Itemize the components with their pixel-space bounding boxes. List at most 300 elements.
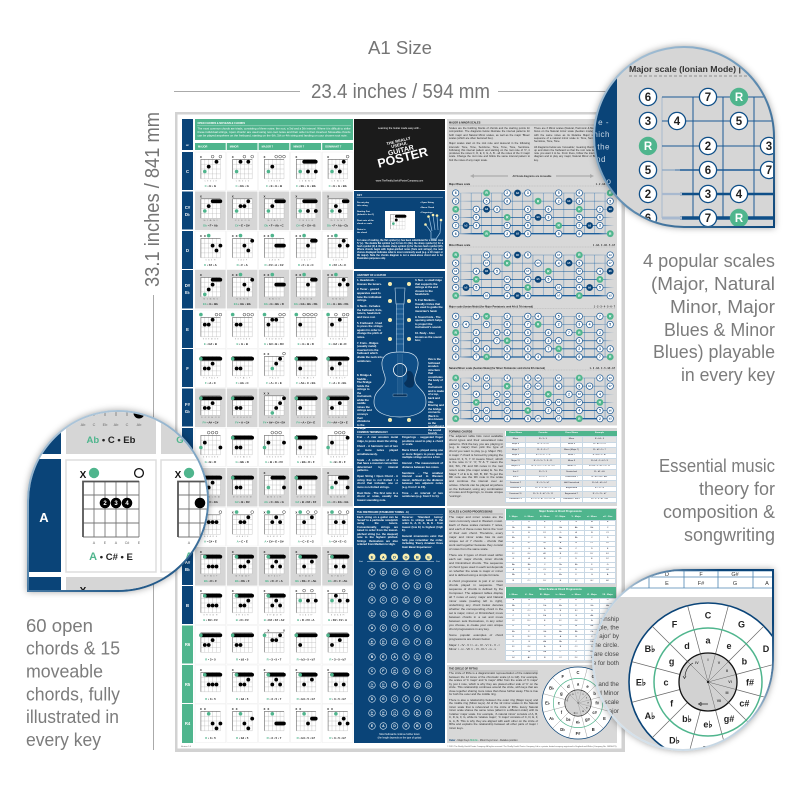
open strings row: B [416,554,419,559]
table: minor scales and chord progressions: C [528,604,530,606]
magnifier: circle of fifths detail [592,569,774,751]
table: minor scales and chord progressions: F [591,599,593,601]
chord row: F: F C F A C F [203,376,218,380]
caption: scales: Blues) playable [653,342,775,362]
fretboard notes: F# [405,712,407,714]
chord row: A sharp [195,547,353,586]
chord row: B: X [264,589,266,593]
chord row: B: B • D# • F# [203,618,218,622]
fretboard notes: C# [382,613,385,615]
fretboard notes: G# [416,684,419,686]
chord row: R4 moveable: R • 3 • 5 • b7 [329,736,346,740]
text: scales and progressions: Minor: i - iv - VII / i - VI - III / i - iv - v [449,647,496,651]
chord row: A sharp: X [232,550,234,554]
table: forming chords: Augmented 7 [565,493,578,495]
table: major scales and chord progressions: C [544,564,546,566]
caption: chords: every key [26,730,101,750]
table: forming chords: Minor (Major 7) [564,449,579,451]
chord row: D: D • F • A • C [298,263,315,267]
grey chord card above: C [126,423,129,427]
table: minor scales and chord progressions: E [513,636,514,638]
table: minor scales and chord progressions: B [513,610,514,612]
chord row: B: X [327,589,329,593]
panel: chords header [182,119,353,150]
chord row: G sharp: Ab Eb Ab C Eb Ab [202,496,220,498]
table: minor scales and chord progressions: i - Minor [509,594,518,596]
chord row: F sharp: F# C# F# A C# F# [233,416,252,419]
chord row: R6 moveable: R • b3 • 5 [236,658,249,662]
chord row: C sharp: Db • F • Ab • C [264,224,285,228]
table: minor scales and chord progressions: iv - Minor [556,594,565,596]
magnifier: major scale detail: 5 [645,165,652,177]
table: forming chords: R • b3 • 5 • 6 [593,443,606,445]
table: major scales and chord progressions: B [528,569,530,571]
fretboard notes: Eb [427,714,431,716]
table: major scales and chord progressions: Eb [575,564,578,566]
table: minor scales and chord progressions: A# [528,657,530,659]
table: minor scales and chord progressions: E [560,610,561,612]
chord row: B: B • D • F# • A [297,618,315,622]
chord row: B: B F# A# D# F# [267,614,282,616]
chord row: F: F • A • C • E [266,381,282,385]
text: terminology right: Fingerings - suggested finger positions used to play a chord or scale. Barre Chord - played using one or more fingers to press down multiple strings across a fret. Interval - The measurement of distance between two notes. Semitone - The smallest interval used in Western music, defined as the distance between two adjacent notes (e.g. from F to F#). Tone - an interval of two semitones (e.g. from F to G). [402,436,443,498]
fretboard notes: E [427,724,430,728]
table: major scales and chord progressions: A [544,548,545,550]
fretboard notes: E [393,584,396,588]
fretboard notes: Bb [427,643,431,645]
fretboard notes: D# [405,670,407,672]
chart: circle of fifths wheel: f [670,698,674,708]
chord row: R4 moveable: X [327,707,329,711]
table: minor scales and chord progressions: F# [575,610,577,612]
table: minor scales and chord progressions: VII - Major [602,594,613,596]
chord row: A: A • C • E • G [298,540,315,544]
table: minor scales and chord progressions: D [607,636,608,638]
fretboard notes: A# [393,670,396,672]
table: major scales and chord progressions: Eb [512,537,515,539]
fretboard notes: Bb [371,643,374,645]
chord row: C sharp: C# G# B E G# [299,220,313,222]
heading: major scale: Major scale (Ionian Mode) | [629,65,741,74]
fretboard notes: A# [371,641,373,643]
circle of fifths legend: Outer - Major Keys Middle - Minor Keys Inner - Relative position [449,739,518,742]
panel: chords header: The most common chords are triads, consisting of three notes: the root, a 3rd and a 5th interval. Where it is difficult to strike [198,128,351,130]
chord row: F: F • Ab • C • Eb [296,381,316,385]
row headers: key names [182,152,193,743]
chart: circle of fifths wheel: g [669,656,674,666]
magnifier: major scale detail: 3 [645,116,651,128]
table: minor scales and chord progressions: C [591,636,593,638]
fretboard notes: D# [427,712,430,714]
chord row: F: F • A • C • Eb [329,381,346,385]
fretboard notes: B [382,584,385,588]
panel: key: the chord [357,231,368,234]
chord row: D: D A C# F# [269,258,280,262]
caption: music theory [659,456,775,545]
chord row: A: A • C# • E [204,540,217,544]
open strings row [359,554,440,563]
table: minor scales and chord progressions: C# [575,646,578,648]
table: major scales and chord progressions: B [560,553,561,555]
chord row: A sharp: Bb • Db • F [235,579,250,583]
table: minor scales and chord progressions: G# [528,646,531,648]
chord row: G: G B D G B F [330,456,345,458]
table: forming chords: Dominant 11 [509,493,522,495]
scale: major [449,306,616,360]
fretboard notes: Db [416,587,419,589]
fretboard notes: D [427,697,430,701]
caption: scales: Blues & Minor [664,320,775,340]
fretboard notes: D# [393,571,396,573]
table: minor scales and chord progressions [505,587,616,661]
partial paragraph text: onship [601,616,620,623]
chord row: D sharp: Eb Bb Eb Gb [236,298,249,300]
panel: logo box: THE REALLY [386,135,411,146]
chord row: G: G • B • D [205,460,216,464]
chord row: D: X [267,234,269,238]
magnifier: major scale detail: R [644,141,653,153]
moveable note arrow [470,174,594,178]
card: A major: 4 [125,501,129,507]
table: minor scales and chord progressions: C [607,625,608,627]
table: major scales and chord progressions: vii° - Dim [603,516,612,518]
table: minor scales and chord progressions: Db [590,641,593,643]
zoomed scale nodes [639,88,778,227]
table: major scales and chord progressions: A [575,532,577,534]
fretboard notes: B [393,683,396,687]
panel: scales background [447,119,617,426]
fretboard notes: G [416,669,419,673]
column headers: DOMINANT 7 [325,144,342,148]
chord row: R4 moveable: R • 3 • 5 [205,736,216,740]
chord row: D: D • F# • A [204,263,218,267]
table: minor scales and chord progressions: Ab [606,604,609,606]
table: minor scales and chord progressions: C [513,615,514,617]
panel: circle of fifths background: THE CIRCLE OF FIFTHS [449,668,478,670]
table: forming chords: Augmented [566,487,577,489]
table: major scales and chord progressions: Bb [591,527,593,529]
column headers: MAJOR 7 [262,144,274,148]
chord row: F: F C F Ab C F [235,376,250,380]
table: major scales and chord progressions: C# [606,532,609,534]
chord row: D: X [264,234,266,238]
chord row: F: F • Ab • C [236,381,250,385]
table: forming chords: Dominant 7 [510,482,521,484]
table: major scales and chord progressions: ii - Minor [524,516,534,518]
table: major scales and chord progressions: D [575,558,577,560]
chord row: G sharp: G# D# F# B D# G# [297,496,316,498]
fretboard notes: G [393,626,396,630]
fretboard notes: Gb [382,686,385,688]
table: major scales and chord progressions: Gb [559,527,562,529]
table: major scales and chord progressions: E [513,542,514,544]
chord row: G sharp: Ab C Gb Ab Eb [330,496,345,498]
chord row: G sharp: G# • B • D# • F# [295,500,317,504]
chord row: R4 moveable: X [299,707,301,711]
fretboard notes: Eb [416,615,419,617]
chord row: R5 moveable: R • b3 • 5 • b7 [297,697,315,701]
table: minor scales and chord progressions: B [544,657,545,659]
open strings row: G [404,554,408,559]
panel: key: Starting Fret [357,210,370,213]
chord row: F sharp: F# • A • C# [235,420,250,424]
table: major scales and chord progressions: D [544,574,546,576]
card: A minor partial: X [175,470,182,481]
chord row: R6 moveable: R • 3 • 5 [205,658,216,662]
table: minor scales and chord progressions: G# [575,620,578,622]
table: forming chords: R • 3 • 5 • 7 • 9 • 11 • 13 [531,465,555,467]
key table strip: D [665,572,669,578]
table: minor scales and chord progressions: Bb [575,631,578,633]
card: A major: 2 [103,501,107,507]
table: major scales and chord progressions: V - Major [572,516,581,518]
partial paragraph text: scale [605,699,620,706]
fretboard notes: A [371,626,374,630]
chord row: R5 moveable: X [232,668,234,672]
chord row: R4 moveable: X [232,707,234,711]
caption: scales: (Major, Natural [651,274,775,294]
caption: chords: chords, fully [26,684,120,704]
chord row: C: X [264,155,266,159]
table: major scales and chord progressions: G# [590,580,593,582]
table: major scales and chord progressions: G [591,574,593,576]
magnifier: major scale detail: 2 [705,141,711,153]
fretboard notes: D# [382,641,385,643]
table: minor scales and chord progressions: D [513,625,514,627]
table: forming chords: Diminished [566,471,577,473]
row headers: key names: D# [185,283,191,288]
table: major scales and chord progressions: D# [543,580,546,582]
fretboard notes: D [382,626,385,630]
fretboard notes: B [416,724,419,728]
fretboard footnote: Most fretboards continue further down [379,733,420,736]
panel: the fretboard [354,508,445,743]
key table strip [592,569,774,588]
row headers: key names: C [186,169,189,174]
chord row: G sharp: Ab Eb G C Eb [267,496,282,498]
chord row: A: A E G# C# E [268,535,281,538]
chord row: E: E • G# • B [204,342,217,346]
table: minor scales and chord progressions: G [607,599,608,601]
magnifier: major scale detail: 7 [705,213,711,225]
table: minor scales and chord progressions: Bb [559,641,562,643]
chord row: C sharp: X [264,194,266,198]
panel: key: (default is fret 1) [357,213,374,216]
chord row: D sharp: Eb Bb Db G [332,298,344,300]
fretboard notes: G# [371,613,373,615]
chord row: E: E B E G# B E [203,338,218,340]
table: major scales and chord progressions: B [544,558,545,560]
fretboard notes: G# [393,641,396,643]
fretboard notes: Gb [416,658,419,660]
fretboard notes: D [405,655,408,659]
table: major scales and chord progressions: Db [559,564,562,566]
footer copyright: © 2019 The Really Useful Poster Company. All rights reserved. The Really Useful Poster Company Ltd is a private limited company registered in England and Wales (Company No. 10856471). [447,745,617,748]
key table strip: A [765,581,769,587]
chart: circle of fifths wheel: G [738,620,745,630]
table: minor scales and chord progressions: G [512,651,514,653]
text: fretboard right: Reverse: 'Standard tuning' refers to strings tuned in the order E, A, D, G, B, E - from lowest (low E) to highest (high E). General mnemonics exist that help you remember the order, including 'Every Amateur Does Gain Basic Experience'. [402,516,443,549]
table: major scales and chord progressions: A [528,558,530,560]
chord row: D sharp: X [200,273,202,277]
table: major scales and chord progressions: iii - Minor [540,516,550,518]
table: forming chords: R • b3 • b5 • bb7 [591,476,608,478]
chord row: D sharp: X [327,273,329,277]
fretboard notes: C [393,697,396,701]
navy poster panel edge [593,46,617,230]
table: forming chords: Chord Name [565,432,578,434]
scale: major blues: Major Blues scale [449,183,471,186]
table: major scales and chord progressions: D [513,532,514,534]
navy poster panel edge: e - [598,118,609,127]
caption: scales: Minor, Major [670,297,775,317]
chord row: G sharp: X [327,471,329,475]
fretboard notes: G [371,598,374,602]
fretboard notes: D# [416,613,419,615]
table: forming chords: R • 3 • 5 • b7 • 9 [535,487,551,489]
navy poster panel edge: hich [593,130,610,139]
table: minor scales and chord progressions: D [528,615,530,617]
chord row: R4 moveable: R • b3 • 5 • b7 [297,736,315,740]
table: major scales and chord progressions: G [528,548,530,550]
table: minor scales and chord progressions: A [560,636,561,638]
chord row: E: E B D G B E [299,338,313,340]
row headers: key names: R5 [185,682,191,687]
panel: forming chords background [447,428,617,506]
row headers: key names: C# [185,205,191,210]
chord row: R4 moveable: X [204,707,206,711]
table: major scales and chord progressions: D# [590,553,593,555]
chord row: C: C E G C E [205,180,217,182]
caption: scales [643,251,775,385]
fretboard notes: A# [416,712,419,714]
chord row: A: A E G C# E [331,535,344,538]
table: minor scales and chord progressions: E [528,625,530,627]
column headers: MINOR [230,144,239,148]
grey chord card above: Ab [137,423,141,427]
table: minor scales and chord progressions: Eb [543,615,546,617]
table: minor scales and chord progressions: Gb [590,604,593,606]
table: major scales and chord progressions: A [513,569,514,571]
panel: logo box [354,119,445,190]
table: forming chords: Major 7 [512,449,519,451]
magnifier: major scale detail: 7 [766,165,772,177]
table: minor scales and chord progressions: E [544,620,545,622]
panel: logo box: GUITAR [387,144,415,158]
chord row: A: X [264,510,266,514]
table: forming chords: Major 13 [511,465,520,467]
table: minor scales and chord progressions: Eb [559,604,562,606]
chord row: C sharp: X [327,194,329,198]
fretboard notes: E [382,655,385,659]
chord row: B: B • D# • F# • A# [264,618,285,622]
panel: logo box: Learning the Guitar made easy with... [378,126,421,130]
chord row: D: D A C F [302,258,311,262]
magnifier: major scale detail: R [735,213,744,225]
panel: key: KEY [357,194,362,197]
table: major scales and chord progressions: E [528,532,530,534]
table: minor scales and chord progressions: Eb [606,641,609,643]
chart: circle of fifths wheel [629,603,787,761]
chord row: C sharp: Db F Cb Db F [331,220,345,222]
table: minor scales and chord progressions: Eb [512,631,515,633]
table: forming chords: R • b3 • 5 [595,438,604,440]
table: major scales and chord progressions: C# [528,580,530,582]
panel: common terminology: COMMON TERMINOLOGY [357,431,388,434]
table: forming chords: Sus 2 [513,471,518,473]
chart: circle of fifths wheel: c [663,678,669,688]
chart: small circle of fifths [542,667,614,739]
chord row: F sharp: F# C# F# A# C# F# [201,416,220,419]
table: major scales and chord progressions: E [607,548,608,550]
panel: scales and chord progressions background: SCALES & CHORD PROGRESSIONS [449,510,493,514]
chord row: G: G B D G B G [203,456,218,458]
chord row: R6 moveable: R • b3 • 5 • b7 [297,658,315,662]
chart: circle of fifths wheel: B♭ [645,644,655,654]
table: minor scales and chord progressions: G [591,610,593,612]
fretboard notes: Ab [382,713,385,716]
table: minor scales and chord progressions: D [591,646,593,648]
magnifier: major scale detail: 5 [736,116,743,128]
fretboard notes: Eb [382,643,385,645]
table: minor scales and chord progressions: F [560,615,561,617]
chord row: C sharp: X [295,194,297,198]
chord row: D: D • F# • A • C# [265,263,284,267]
chord row: F: F A C E [270,376,279,380]
table: minor scales and chord progressions: Bb [543,651,546,653]
fretboard notes: A# [382,571,385,573]
chord row: R4 moveable: X [295,707,297,711]
chord row: B: B • D • F# [236,618,249,622]
fretboard notes: A [393,655,396,659]
row headers: key names: A [186,524,189,529]
chord row: D sharp: X [264,273,266,277]
table: forming chords: Chord Name [509,432,522,434]
chord row: R4 moveable: X [267,707,269,711]
table: major scales and chord progressions: E [591,558,593,560]
fretboard notes: Gb [393,615,397,617]
table: major scales and chord progressions: F [528,537,530,539]
fretboard notes: F# [427,585,430,587]
chord row: C: X [200,155,202,159]
chord row: R6 moveable: R • 3 • 5 • b7 [329,658,346,662]
column headers [195,143,353,150]
column headers: MINOR 7 [293,144,305,148]
panel: key: this string [357,204,368,207]
fretboard notes: B [427,655,430,659]
chord row: R5 moveable: R • 3 • 5 • b7 [329,697,346,701]
chord row: G sharp: G# D# G# B D# G# [233,496,252,498]
fretboard notes: F [394,598,396,602]
table: forming chords: R • 3 • 5 • 7 [537,449,549,451]
table: forming chords: Minor 9 [568,460,575,462]
chord row: A: X [295,510,297,514]
table: major scales and chord progressions: B [591,532,593,534]
magnifier: major scale detail: 6 [645,92,651,104]
table: major scales and chord progressions: F [513,548,514,550]
table: major scales and chord progressions [505,509,616,584]
table: minor scales and chord progressions: Ab [543,641,546,643]
table: major scales and chord progressions: B [575,542,577,544]
fretboard notes: G# [427,613,430,615]
chord row: R5 moveable: X [295,668,297,672]
chord row: R4 moveable: X [264,707,266,711]
row headers: key names: B♭ [185,567,190,572]
text: forming chords: The adjacent table lists most available chord types and their associated note patterns. Pick the key you are playing in (e.g. E major) then pick the type of chord you want to play (e.g. Major 7th). A major 7 chord is formed by playing the notes R, 3, 5, 7. R means 'Root', which is the note in '1'. '3', '5' & '7' mean the 3rd, 5th, 7th and 9th notes in the root note's scale (the major scale) E. So the Major 7 of E is E, G#, B, D#. To get the 9th note use the 9th note in the scale and continue the interval over an octave. Chords can be played anywhere on the fretboard, using any combination of notes and fingerings, to create unique 'voicings'. [449,434,503,498]
grey panel [592,597,774,751]
table: major scales and chord progressions: Major Scales & Chord Progressions [539,510,582,513]
table: minor scales and chord progressions: C# [528,610,530,612]
